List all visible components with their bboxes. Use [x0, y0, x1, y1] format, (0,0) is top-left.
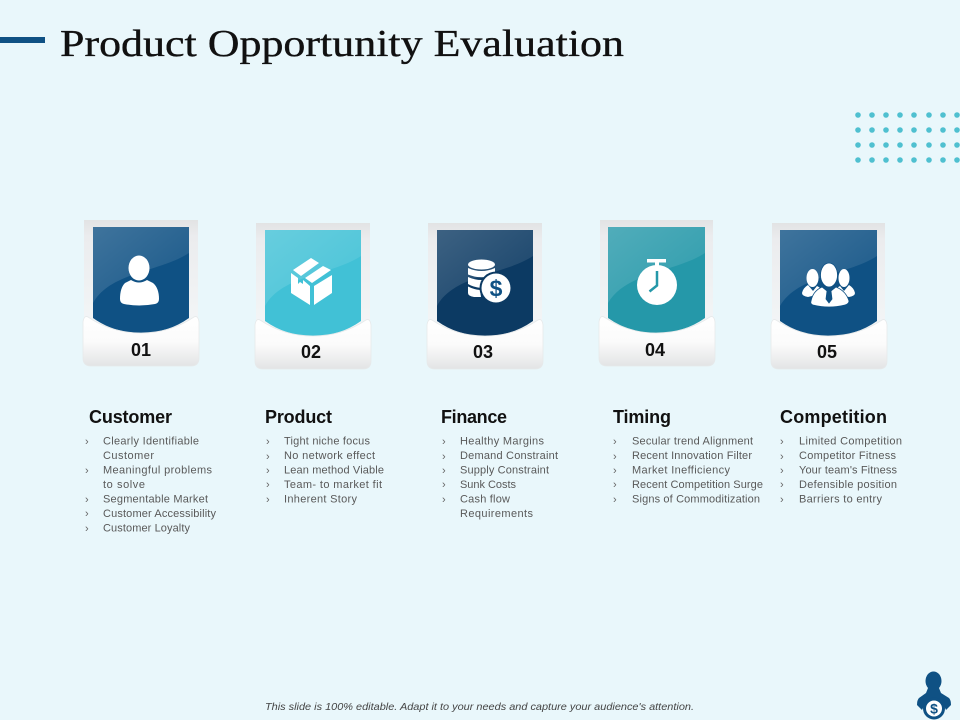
list: product — [266, 436, 384, 506]
list: competition: › — [780, 494, 784, 506]
list: competition: › — [780, 465, 784, 477]
list: customer: Customer Accessibility — [103, 508, 216, 520]
list: finance: › — [442, 494, 446, 506]
number 05: 05 — [817, 342, 837, 362]
list: timing: Market Inefficiency — [632, 464, 730, 476]
list: finance: › — [442, 479, 446, 491]
list: competition: Your team's Fitness — [799, 464, 898, 476]
list: finance: Healthy Margins — [460, 436, 544, 448]
list: customer: Customer Loyalty — [103, 522, 190, 534]
heading: customer: Customer — [89, 407, 172, 427]
list: customer: Clearly Identifiable — [103, 436, 199, 448]
card 03 finance — [427, 223, 543, 369]
list: finance — [442, 436, 558, 520]
card 05 competition — [771, 223, 887, 369]
card 02 product — [255, 223, 371, 369]
list: timing: Recent Innovation Filter — [632, 450, 752, 462]
list: customer: Segmentable Market — [103, 494, 208, 506]
list: finance: Supply Constraint — [460, 464, 549, 476]
icon: coins and dollar: $ — [490, 276, 503, 302]
list: customer: › — [85, 465, 89, 477]
list: timing: › — [613, 451, 617, 463]
list: timing — [613, 436, 763, 506]
list: customer: Meaningful problems — [103, 464, 212, 476]
list: competition: Defensible position — [799, 479, 897, 491]
title: Product Opportunity Evaluation — [60, 23, 624, 65]
number 02: 02 — [301, 342, 321, 362]
list: competition: Limited Competition — [799, 436, 902, 448]
heading: product: Product — [265, 407, 332, 427]
icon: coins and dollar — [468, 260, 512, 304]
list: finance: › — [442, 451, 446, 463]
number 04: 04 — [645, 340, 665, 360]
list: timing: Recent Competition Surge — [632, 479, 763, 491]
list: finance: Sunk Costs — [460, 479, 516, 491]
column: customer — [85, 407, 216, 535]
icon: stopwatch — [637, 259, 677, 305]
list: product: › — [266, 479, 270, 491]
icon: person — [120, 256, 159, 306]
list: customer: › — [85, 508, 89, 520]
list: product: › — [266, 436, 270, 448]
list: timing: › — [613, 494, 617, 506]
list: timing: › — [613, 465, 617, 477]
list: customer: › — [85, 523, 89, 535]
heading: finance: Finance — [441, 407, 507, 427]
footer note: This slide is 100% editable. Adapt it to your needs and capture your audience's attention. — [265, 701, 694, 713]
list: competition: › — [780, 436, 784, 448]
list: competition: Competitor Fitness — [799, 450, 896, 462]
list: customer: to solve — [103, 479, 145, 491]
number 03: 03 — [473, 342, 493, 362]
list: product: Inherent Story — [284, 494, 358, 506]
list: timing: › — [613, 479, 617, 491]
list: finance: › — [442, 465, 446, 477]
list: competition: › — [780, 451, 784, 463]
list: competition — [780, 436, 902, 506]
column: timing — [613, 407, 763, 506]
card 01 customer — [83, 220, 199, 366]
list: finance: Demand Constraint — [460, 450, 558, 462]
icon: team — [802, 263, 855, 307]
list: product: › — [266, 494, 270, 506]
list: product: › — [266, 465, 270, 477]
dot pattern — [855, 112, 960, 163]
list: competition: Barriers to entry — [799, 494, 882, 506]
list: product: Team- to market fit — [284, 479, 382, 491]
list: competition: › — [780, 479, 784, 491]
accent bar — [0, 37, 45, 43]
list: timing: Signs of Commoditization — [632, 494, 760, 506]
icon: person with dollar target — [917, 672, 951, 720]
list: product: No network effect — [284, 450, 375, 462]
list: customer: Customer — [103, 450, 154, 462]
list: finance: Requirements — [460, 508, 534, 520]
column: finance — [441, 407, 558, 520]
list: customer: › — [85, 436, 89, 448]
list: timing: › — [613, 436, 617, 448]
list: finance: › — [442, 436, 446, 448]
list: product: Tight niche focus — [284, 436, 370, 448]
icon: person with dollar target: $ — [930, 700, 938, 716]
list: timing: Secular trend Alignment — [632, 436, 753, 448]
icon: box — [291, 258, 332, 305]
list: customer — [85, 436, 216, 535]
list: product: › — [266, 451, 270, 463]
column: product — [265, 407, 384, 506]
column: competition — [780, 407, 902, 506]
number 01: 01 — [131, 340, 151, 360]
heading: competition: Competition — [780, 407, 887, 427]
list: product: Lean method Viable — [284, 464, 384, 476]
list: customer: › — [85, 494, 89, 506]
card 04 timing — [599, 220, 715, 366]
heading: timing: Timing — [613, 407, 671, 427]
list: finance: Cash flow — [460, 494, 510, 506]
